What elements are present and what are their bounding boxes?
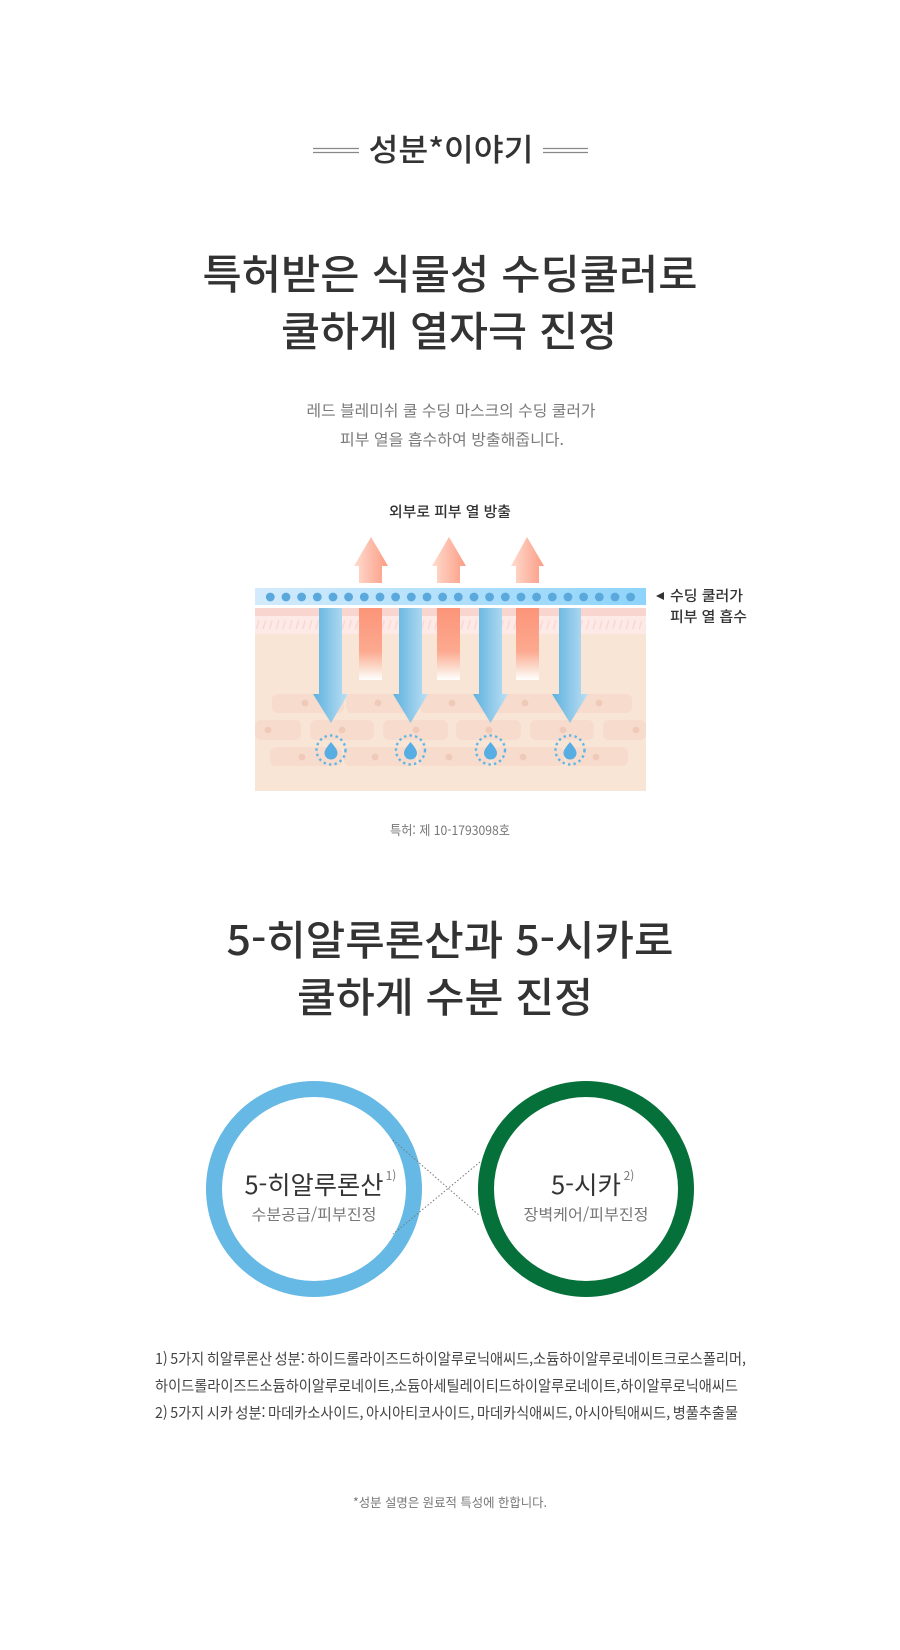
text: 5-hyaluronic acid: 5-히알루론산 bbox=[244, 1166, 384, 1202]
section label text: 성분*이야기 bbox=[368, 125, 534, 170]
text: 5-cica: 2) bbox=[624, 1167, 634, 1184]
footnotes: 1) 5가지 히알루론산 성분: 하이드롤라이즈드하이알루로닉애씨드,소듐하이알루로네이트크로스폴리머, bbox=[155, 1348, 746, 1369]
venn diagram bbox=[214, 1089, 686, 1289]
section label bbox=[313, 125, 588, 170]
text: 5-hyaluronic acid: 수분공급/피부진정 bbox=[252, 1203, 376, 1225]
text: 5-cica: 5-시카 bbox=[551, 1166, 621, 1202]
skin cells bbox=[255, 694, 646, 766]
skin layers bbox=[255, 608, 646, 791]
heading 1 bbox=[202, 241, 698, 358]
cooling band with dots bbox=[255, 588, 646, 605]
heading 2: 쿨하게 수분 진정 bbox=[297, 964, 593, 1024]
description text: 피부 열을 흡수하여 방출해줍니다. bbox=[340, 428, 564, 450]
footnotes: 하이드롤라이즈드소듐하이알루로네이트,소듐아세틸레이티드하이알루로네이트,하이알루로닉애씨드 bbox=[155, 1375, 738, 1396]
heading 1: 쿨하게 열자극 진정 bbox=[281, 298, 617, 358]
patent caption: 특허: 제 10-1793098호 bbox=[390, 820, 510, 839]
diagram: skin cooling bbox=[255, 501, 747, 791]
circle: 5-cica bbox=[486, 1089, 686, 1289]
arrows: heat going up bbox=[354, 537, 544, 583]
disclaimer: *성분 설명은 원료적 특성에 한합니다. bbox=[353, 1492, 547, 1511]
description text: 레드 블레미쉬 쿨 수딩 마스크의 수딩 쿨러가 bbox=[306, 399, 596, 421]
text: 5-cica: 장벽케어/피부진정 bbox=[524, 1203, 648, 1225]
dotted connector bbox=[393, 1140, 480, 1234]
callout: cooler absorbs skin heat: 수딩 쿨러가 bbox=[670, 585, 743, 606]
callout: cooler absorbs skin heat bbox=[656, 585, 747, 627]
label: external heat release: 외부로 피부 열 방출 bbox=[389, 501, 511, 522]
icons: water drops bbox=[316, 736, 584, 764]
heading 2 bbox=[226, 907, 674, 1024]
text: 5-hyaluronic acid bbox=[244, 1166, 396, 1225]
heading 1: 특허받은 식물성 수딩쿨러로 bbox=[202, 241, 698, 301]
text: 5-cica bbox=[524, 1166, 648, 1225]
footnotes bbox=[155, 1348, 746, 1423]
text: 5-hyaluronic acid: 1) bbox=[386, 1167, 396, 1184]
circle: 5-hyaluronic acid bbox=[214, 1089, 414, 1289]
callout: cooler absorbs skin heat: 피부 열 흡수 bbox=[670, 606, 747, 627]
heat columns bbox=[359, 608, 539, 680]
heading 2: 5-히알루론산과 5-시카로 bbox=[226, 907, 674, 967]
arrows: cooling going down bbox=[313, 608, 588, 723]
description text bbox=[306, 399, 596, 450]
footnotes: 2) 5가지 시카 성분: 마데카소사이드, 아시아티코사이드, 마데카식애씨드, 아시아틱애씨드, 병풀추출물 bbox=[155, 1402, 738, 1423]
